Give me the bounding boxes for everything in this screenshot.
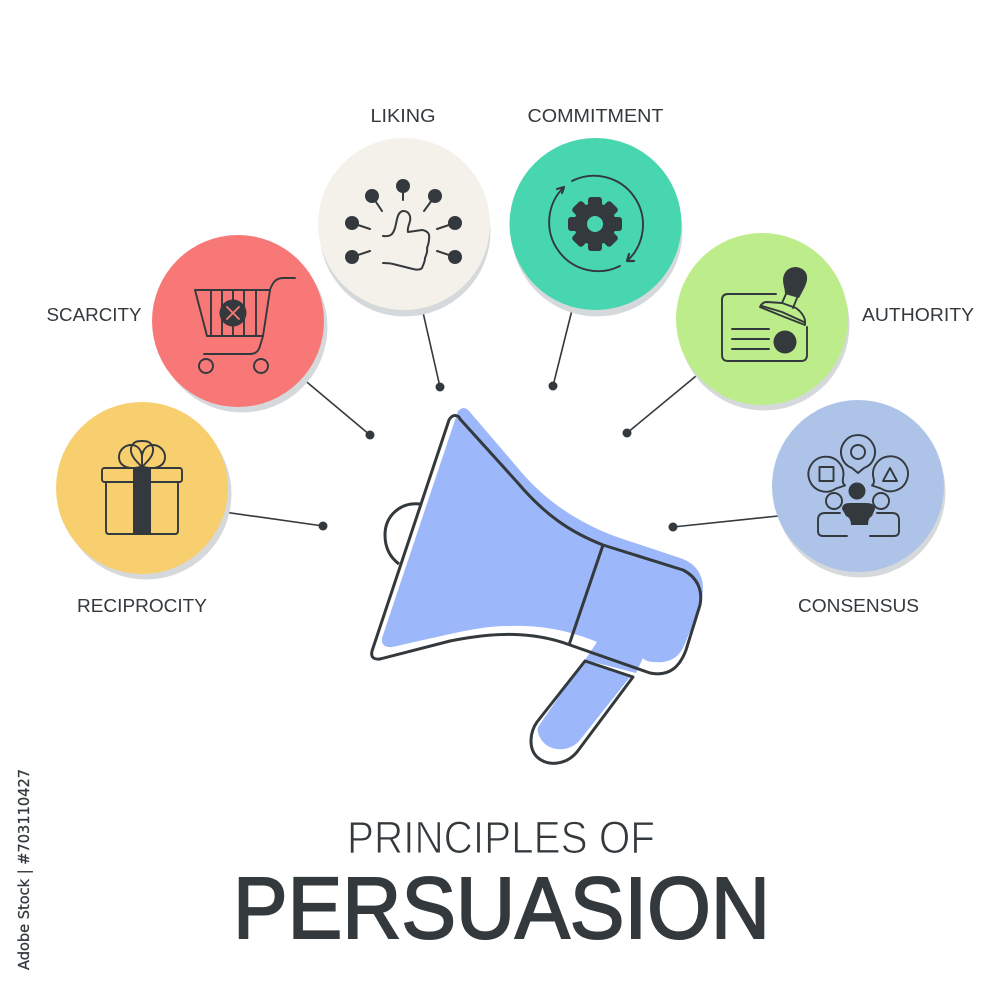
connector: liking <box>422 308 444 392</box>
label: reciprocity: RECIPROCITY <box>77 595 207 616</box>
connector: commitment <box>548 306 573 390</box>
title line 2: PERSUASION <box>233 860 770 957</box>
circle: reciprocity <box>56 402 232 580</box>
connector: authority <box>622 376 696 438</box>
title line 1: PRINCIPLES OF <box>347 812 655 863</box>
circle: authority <box>676 233 850 410</box>
icon: gear with cycle arrows <box>549 176 643 271</box>
icon: thumbs up with pins <box>345 179 462 270</box>
label: liking: LIKING <box>370 105 436 126</box>
connector: consensus <box>668 516 778 532</box>
icon: stamp on certificate <box>722 267 807 361</box>
megaphone outline <box>372 416 701 674</box>
megaphone <box>372 408 703 763</box>
connector: scarcity <box>302 378 374 440</box>
megaphone divider <box>569 545 603 645</box>
label: authority: AUTHORITY <box>862 304 974 325</box>
label: consensus: CONSENSUS <box>798 595 919 616</box>
connector: reciprocity <box>224 512 328 530</box>
label: commitment: COMMITMENT <box>528 105 664 126</box>
label: scarcity: SCARCITY <box>46 304 142 325</box>
handle outline <box>531 661 633 763</box>
side credit: Adobe Stock | #703110427 <box>15 769 33 970</box>
megaphone fill <box>382 408 703 673</box>
circle: scarcity <box>152 235 328 412</box>
icon: group with speech bubbles <box>808 435 908 536</box>
circle: liking <box>318 138 490 316</box>
megaphone back cap <box>385 504 420 564</box>
handle fill <box>538 659 630 749</box>
circle: commitment <box>510 138 682 316</box>
circle: consensus <box>772 400 946 578</box>
icon: shopping cart with cross <box>195 278 295 373</box>
icon: gift box <box>102 441 182 534</box>
